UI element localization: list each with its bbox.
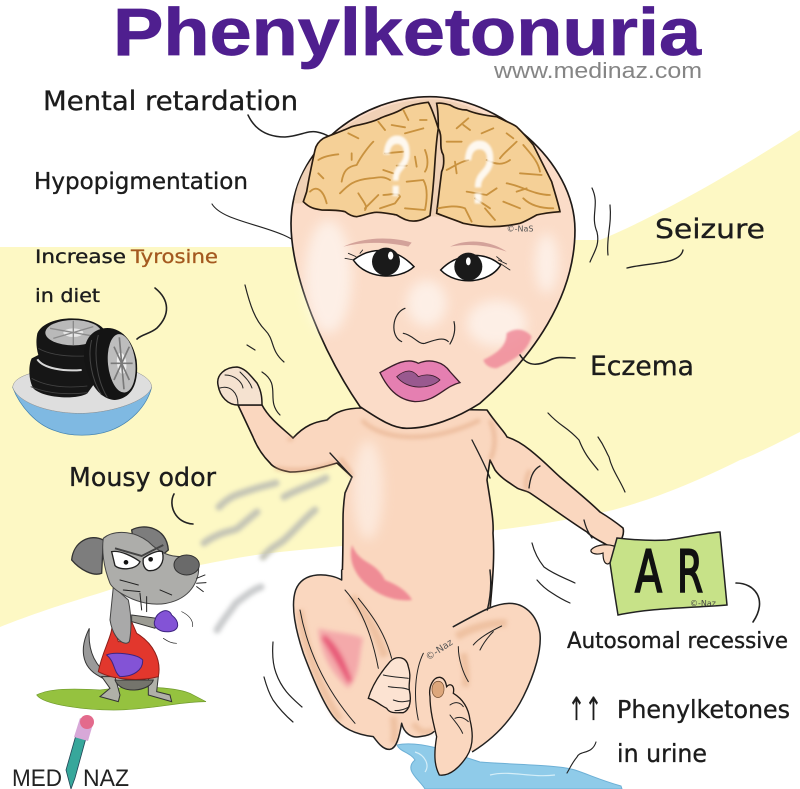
rat character bbox=[37, 527, 206, 710]
label: mental retardation: Mental retardation bbox=[43, 86, 298, 117]
right foot bbox=[430, 677, 472, 775]
label: seizure: Seizure bbox=[655, 214, 765, 245]
nose bbox=[394, 308, 455, 344]
right brain hemisphere bbox=[437, 103, 560, 227]
motion marks bbox=[163, 612, 193, 643]
head bbox=[291, 97, 575, 428]
left fist bbox=[218, 367, 262, 405]
label: mousy odor: Mousy odor bbox=[69, 463, 216, 493]
pencil bbox=[66, 715, 94, 789]
legs bbox=[100, 677, 172, 702]
label: autosomal recessive bbox=[567, 583, 788, 654]
whiskers bbox=[120, 575, 206, 612]
leg shading bbox=[300, 597, 507, 743]
question marks: ? bbox=[382, 119, 411, 213]
baby body bbox=[238, 405, 623, 700]
arm shading bbox=[275, 420, 530, 490]
arm creases bbox=[330, 440, 592, 538]
eczema on torso bbox=[351, 545, 412, 600]
left eye bbox=[345, 248, 414, 276]
rat head bbox=[103, 532, 199, 604]
label: increase tyrosine in diet bbox=[35, 246, 218, 339]
tail bbox=[83, 628, 112, 683]
brain bbox=[303, 102, 560, 227]
left brain hemisphere bbox=[303, 102, 438, 221]
cheek eczema bbox=[483, 330, 532, 368]
seizure motion lines bbox=[245, 188, 625, 722]
grass bbox=[37, 687, 206, 710]
ar sign bbox=[610, 532, 727, 615]
stacked tyres bbox=[29, 318, 107, 397]
label: increase tyrosine in diet: Increase bbox=[35, 246, 126, 268]
thighs and pelvis bbox=[294, 570, 540, 752]
left foot bbox=[368, 658, 410, 713]
label: phenylketones in urine: ↑↑ bbox=[568, 690, 602, 728]
eyes bbox=[112, 545, 163, 571]
question marks bbox=[382, 119, 495, 221]
signature: ©-NaS bbox=[507, 225, 533, 234]
right hand fingers bbox=[591, 545, 616, 564]
face outline bbox=[291, 97, 575, 428]
label: increase tyrosine in diet: in diet bbox=[35, 285, 100, 307]
logo: medinaz pencil bbox=[12, 715, 129, 789]
eczema on leg bbox=[318, 628, 363, 688]
leg creases bbox=[300, 590, 502, 723]
big toenail bbox=[432, 681, 444, 697]
eyebrows bbox=[343, 239, 507, 252]
red vest bbox=[98, 618, 159, 679]
urine puddle bbox=[397, 744, 622, 789]
ears bbox=[72, 527, 168, 574]
icon: bowl of tyres bbox=[13, 318, 152, 435]
label: mental retardation bbox=[43, 86, 343, 146]
lips bbox=[380, 361, 460, 402]
nose bbox=[174, 555, 199, 575]
label: seizure bbox=[627, 214, 765, 268]
question marks: ? bbox=[463, 123, 495, 221]
ar sign: R bbox=[677, 538, 703, 606]
website url: www.medinaz.com bbox=[493, 58, 702, 83]
signature on thigh: ©-Naz bbox=[424, 637, 455, 663]
label: eczema: Eczema bbox=[590, 351, 694, 382]
upright tyre bbox=[84, 328, 138, 400]
label: autosomal recessive: Autosomal recessive bbox=[567, 629, 788, 654]
body highlight bbox=[353, 440, 383, 540]
right eye bbox=[441, 253, 510, 281]
label: eczema bbox=[520, 351, 694, 382]
ar sign: ©-Naz bbox=[690, 599, 716, 608]
label: hypopigmentation bbox=[34, 169, 305, 250]
leg outlines bbox=[294, 570, 540, 752]
neck and arm bbox=[110, 587, 131, 643]
small toes bbox=[450, 703, 468, 733]
boxing gloves bbox=[107, 611, 178, 677]
label: phenylketones in urine: Phenylketones bbox=[617, 695, 790, 724]
ar sign: A bbox=[635, 538, 662, 606]
label: increase tyrosine in diet: Tyrosine bbox=[130, 246, 218, 268]
label: hypopigmentation: Hypopigmentation bbox=[34, 169, 248, 195]
background: yellow band bbox=[0, 130, 800, 627]
skull band shading bbox=[294, 99, 560, 217]
torso and arms bbox=[238, 405, 623, 700]
baby legs and feet bbox=[294, 570, 540, 775]
face highlights bbox=[305, 220, 558, 347]
smoke: mousy odor bbox=[204, 478, 326, 630]
label: phenylketones in urine bbox=[567, 690, 790, 773]
bowl bbox=[13, 371, 152, 435]
label: phenylketones in urine: in urine bbox=[617, 739, 707, 768]
label: mousy odor bbox=[69, 463, 216, 524]
